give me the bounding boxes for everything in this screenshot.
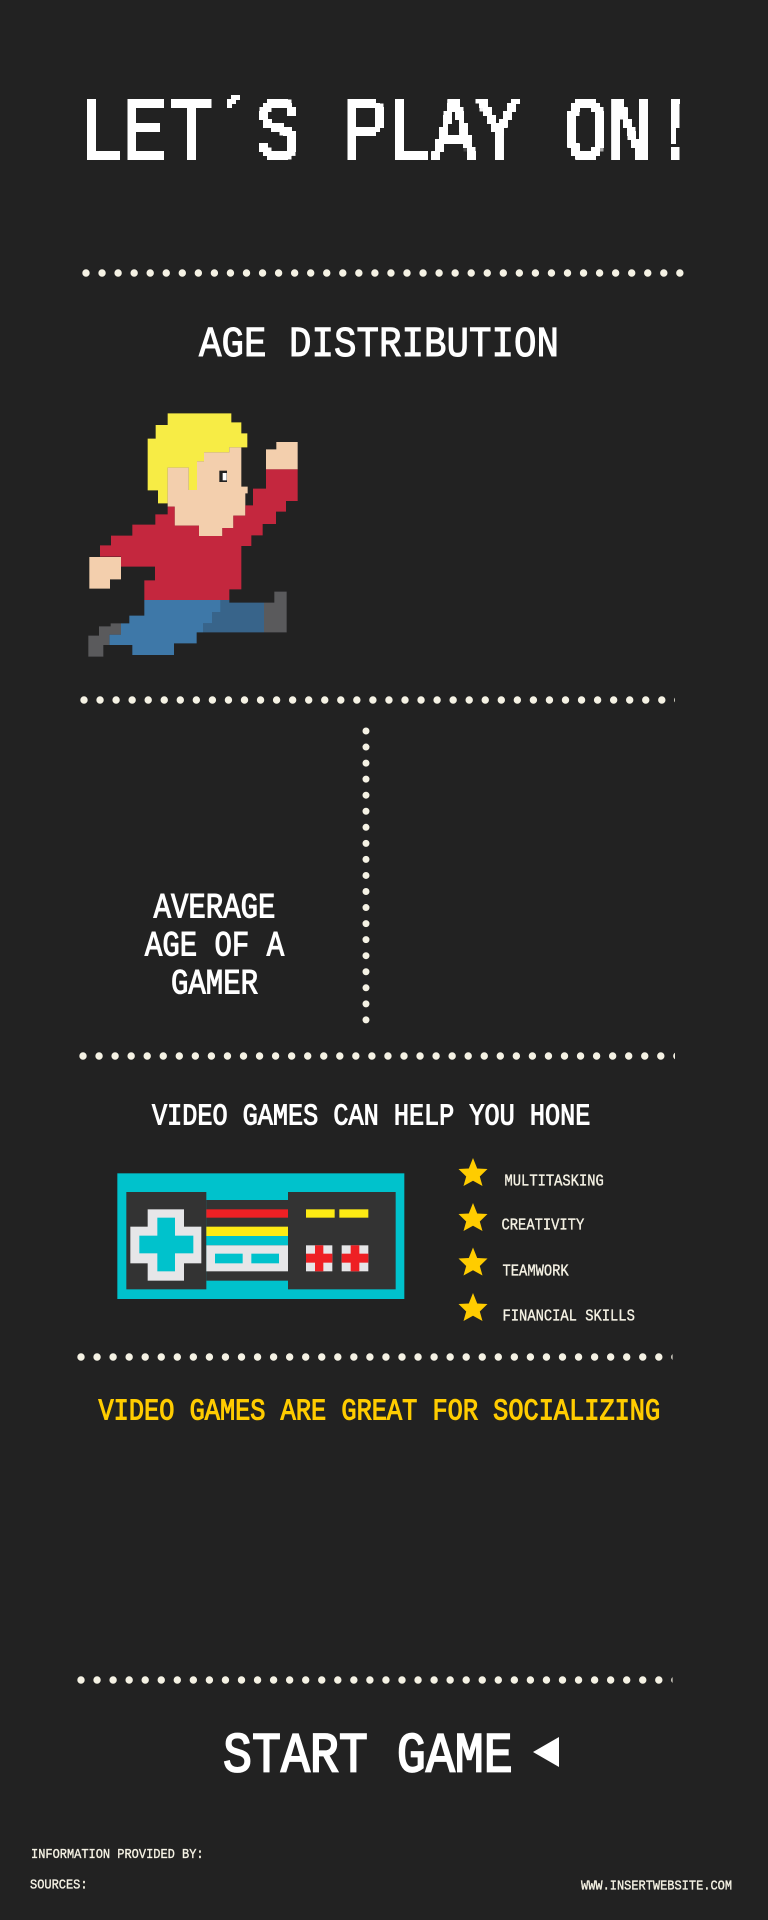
controller buttons: [306, 1245, 368, 1271]
list: skills: [502, 1171, 635, 1326]
heading: age distribution: AGE DISTRIBUTION: [199, 322, 559, 370]
footer: website: WWW.INSERTWEBSITE.COM: [581, 1878, 732, 1894]
heading: socializing: VIDEO GAMES ARE GREAT FOR SOCIALIZING: [98, 1396, 660, 1429]
controller d-pad: [130, 1209, 201, 1281]
text: average age of a gamer: GAMER: [171, 964, 258, 1004]
icon: star 4: [458, 1293, 488, 1321]
icon: star 1: [458, 1158, 488, 1186]
text: average age of a gamer: AGE OF A: [145, 926, 285, 966]
call to action: start game: START GAME: [223, 1724, 513, 1789]
list: skills: CREATIVITY: [502, 1215, 584, 1235]
footer: sources: SOURCES:: [30, 1877, 88, 1893]
icon: star 2: [458, 1203, 488, 1231]
list: skills: TEAMWORK: [502, 1261, 569, 1281]
icon: game controller: [117, 1173, 404, 1299]
list: skills: FINANCIAL SKILLS: [502, 1306, 635, 1326]
list: skills: MULTITASKING: [504, 1171, 604, 1191]
text: average age of a gamer: [145, 888, 285, 1004]
icon: star 3: [458, 1248, 488, 1276]
heading: video games can help you hone: VIDEO GAMES CAN HELP YOU HONE: [152, 1100, 590, 1134]
text: average age of a gamer: AVERAGE: [154, 888, 275, 928]
icon: running pixel character: [88, 413, 298, 657]
icon: left arrow: [533, 1737, 559, 1767]
title: LET´S PLAY ON!: [80, 85, 696, 186]
footer: information provided by: INFORMATION PROVIDED BY:: [31, 1846, 204, 1862]
